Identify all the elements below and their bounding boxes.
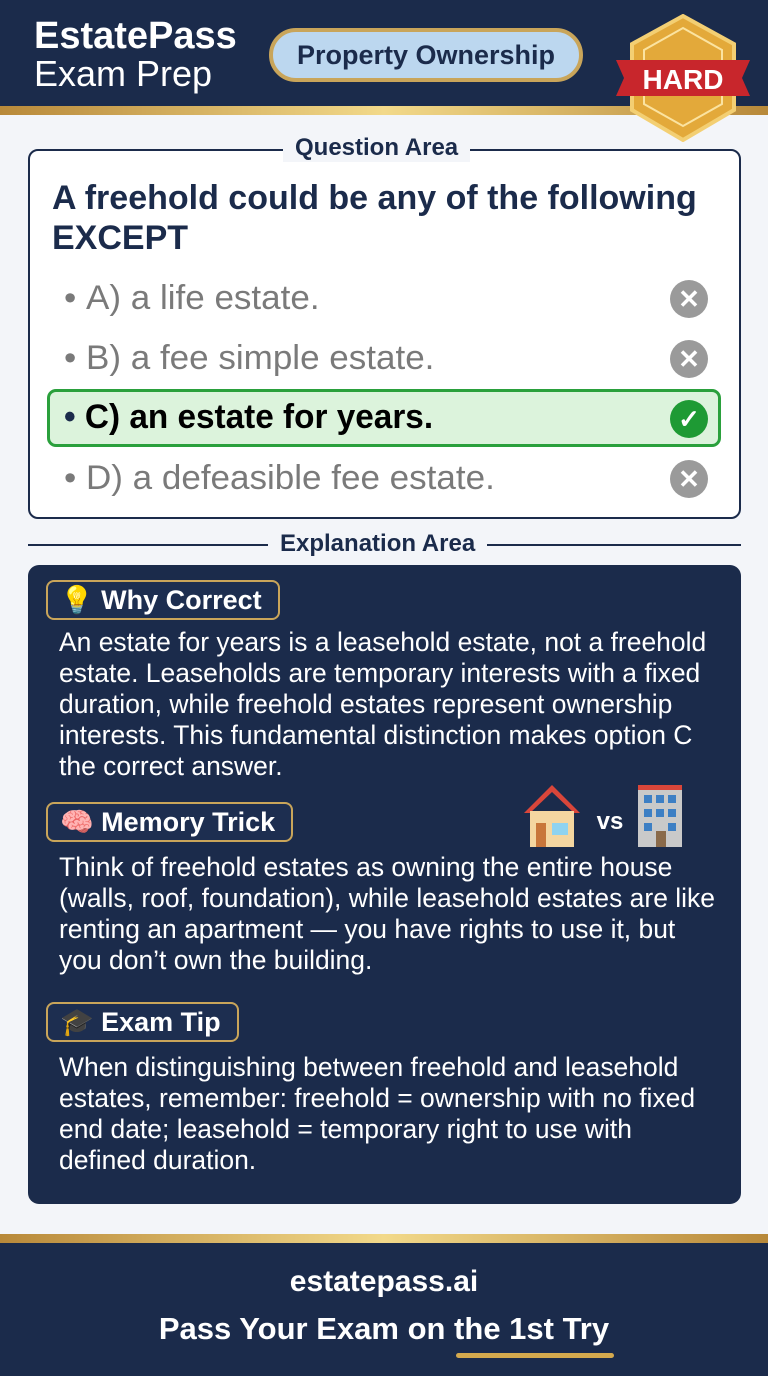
memory trick text: (walls, roof, foundation), while leasehold estates are like bbox=[59, 883, 715, 913]
why correct text: estate. Leaseholds are temporary interests with a fixed bbox=[59, 658, 700, 688]
exam tip text: estates, remember: freehold = ownership with no fixed bbox=[59, 1083, 695, 1113]
header bar bbox=[0, 0, 768, 108]
icon: check: ✓ bbox=[678, 404, 700, 434]
exam tip tag bbox=[46, 1002, 239, 1042]
exam tip tag: 🎓 Exam Tip bbox=[60, 1007, 221, 1037]
explanation panel bbox=[28, 565, 741, 1204]
exam tip text: defined duration. bbox=[59, 1145, 256, 1175]
question area heading: Question Area bbox=[295, 134, 458, 161]
icon: house vs building bbox=[524, 785, 682, 847]
memory trick text: you don’t own the building. bbox=[59, 945, 372, 975]
option B: • B) a fee simple estate. bbox=[64, 339, 434, 377]
why correct tag: 💡 Why Correct bbox=[60, 585, 262, 615]
exam tip text: When distinguishing between freehold and leasehold bbox=[59, 1052, 678, 1082]
difficulty badge bbox=[616, 14, 750, 142]
category pill: Property Ownership bbox=[297, 40, 555, 70]
footer tagline: Pass Your Exam on the 1st Try bbox=[159, 1311, 609, 1346]
explanation divider bbox=[28, 544, 741, 546]
why correct tag bbox=[46, 580, 280, 620]
icon: x A: ✕ bbox=[678, 284, 700, 314]
footer gold stripe bbox=[0, 1234, 768, 1243]
why correct text: interests. This fundamental distinction makes option C bbox=[59, 720, 692, 750]
why correct text bbox=[59, 627, 706, 781]
memory trick text: renting an apartment — you have rights to use it, but bbox=[59, 914, 675, 944]
why correct text: An estate for years is a leasehold estate, not a freehold bbox=[59, 627, 706, 657]
exam tip text: end date; leasehold = temporary right to use with bbox=[59, 1114, 632, 1144]
brand title: EstatePass bbox=[34, 15, 237, 57]
footer site: estatepass.ai bbox=[290, 1265, 478, 1298]
memory trick text bbox=[59, 852, 715, 975]
icon: x A bbox=[670, 280, 708, 318]
explanation area heading: Explanation Area bbox=[280, 530, 475, 557]
icon: x B bbox=[670, 340, 708, 378]
memory trick text: Think of freehold estates as owning the entire house bbox=[59, 852, 672, 882]
question panel bbox=[28, 149, 741, 519]
question text: EXCEPT bbox=[52, 219, 188, 257]
option A: • A) a life estate. bbox=[64, 279, 320, 317]
brand title: Exam Prep bbox=[34, 53, 212, 94]
icon: x D: ✕ bbox=[678, 464, 700, 494]
category pill bbox=[269, 28, 583, 82]
why correct text: the correct answer. bbox=[59, 751, 283, 781]
option C correct bbox=[47, 389, 721, 447]
icon: house vs building: vs bbox=[597, 808, 623, 835]
brand title bbox=[34, 15, 237, 94]
memory trick tag: 🧠 Memory Trick bbox=[60, 807, 275, 837]
footer bbox=[0, 1243, 768, 1376]
question text: A freehold could be any of the following bbox=[52, 179, 697, 217]
icon: x B: ✕ bbox=[678, 344, 700, 374]
option D: • D) a defeasible fee estate. bbox=[64, 459, 495, 497]
question text bbox=[52, 179, 697, 257]
exam tip text bbox=[59, 1052, 695, 1175]
icon: x D bbox=[670, 460, 708, 498]
text: • C) an estate for years. bbox=[64, 398, 433, 436]
difficulty badge: HARD bbox=[643, 64, 723, 95]
memory trick tag bbox=[46, 802, 293, 842]
icon: check bbox=[670, 400, 708, 438]
why correct text: duration, while freehold estates represent ownership bbox=[59, 689, 672, 719]
gold stripe bbox=[0, 106, 768, 115]
underline swoosh bbox=[456, 1353, 614, 1358]
